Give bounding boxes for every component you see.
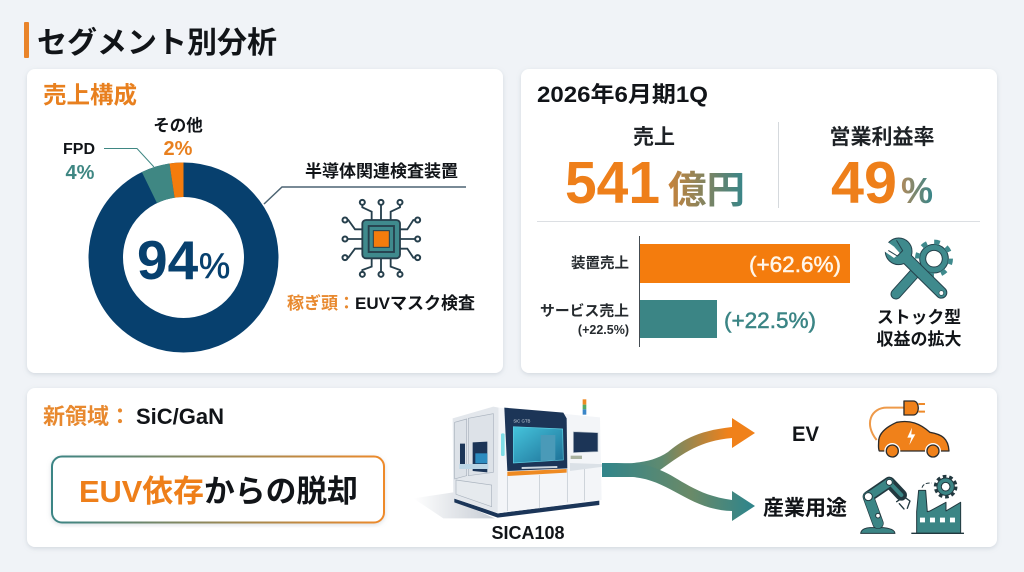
label: industrial use: 産業用途 bbox=[763, 497, 847, 520]
label: other 2%: 2% bbox=[164, 138, 193, 160]
metric: sales 541 oku yen: 541 bbox=[565, 150, 660, 216]
label: FPD 4% bbox=[63, 141, 154, 184]
label: FPD 4%: 4% bbox=[66, 162, 95, 184]
label: SICA108: SICA108 bbox=[492, 523, 564, 543]
icon: electric car bbox=[870, 401, 949, 459]
illustration: SICA108 machine: SiC GTB bbox=[513, 419, 531, 424]
panel: sales composition bbox=[27, 69, 503, 373]
donut chart: % bbox=[199, 247, 230, 286]
label: EV: EV bbox=[792, 423, 819, 446]
bar chart: sales growth: 装置売上 bbox=[571, 255, 629, 272]
caption: stock revenue expansion: ストック型 bbox=[877, 308, 961, 327]
icon: factory and gear bbox=[911, 476, 964, 533]
bar chart: sales growth bbox=[540, 236, 850, 347]
icon: chip bbox=[342, 200, 420, 277]
label: semiconductor inspection equipment: 半導体関連検査装置 bbox=[305, 162, 458, 181]
metric: sales 541 oku yen: 売上 bbox=[633, 126, 675, 149]
title: セグメント別分析 bbox=[37, 27, 277, 60]
metric: operating margin 49%: 営業利益率 bbox=[830, 126, 934, 149]
label: FPD 4%: FPD bbox=[63, 141, 95, 158]
label: other 2% bbox=[153, 116, 203, 160]
panel heading: period: 2026年6月期1Q bbox=[537, 82, 708, 107]
heading accent bar bbox=[24, 22, 29, 58]
caption: stock revenue expansion bbox=[876, 308, 962, 349]
label: semiconductor inspection equipment bbox=[264, 162, 466, 204]
icon: wrench and gear bbox=[883, 238, 951, 295]
donut chart: 94 bbox=[137, 229, 199, 291]
metric: sales 541 oku yen bbox=[565, 126, 745, 216]
illustration: SICA108 machine bbox=[413, 399, 608, 518]
donut chart bbox=[106, 162, 261, 335]
metric: operating margin 49% bbox=[830, 126, 934, 216]
bar chart: sales growth: (+22.5%) bbox=[578, 323, 629, 337]
caption: stock revenue expansion: 収益の拡大 bbox=[876, 330, 962, 349]
caption: top earner EUV mask inspection: 稼ぎ頭：EUVマスク検査 bbox=[287, 293, 475, 313]
callout: departure from EUV dependence bbox=[52, 456, 384, 522]
bar chart: sales growth: (+62.6%) bbox=[749, 252, 841, 277]
bar chart: sales growth: (+22.5%) bbox=[724, 308, 816, 333]
callout: departure from EUV dependence: EUV依存からの脱却 bbox=[79, 474, 358, 509]
metric: sales 541 oku yen: 億円 bbox=[668, 170, 745, 212]
panel heading: sales composition: 売上構成 bbox=[43, 82, 137, 108]
panel heading: new domain SiC/GaN: 新領域： bbox=[43, 404, 131, 429]
panel heading: new domain SiC/GaN: SiC/GaN bbox=[136, 404, 224, 429]
bar chart: sales growth: サービス売上 bbox=[540, 302, 629, 320]
metric: operating margin 49%: 49 bbox=[831, 150, 897, 216]
arrow: to EV bbox=[602, 418, 755, 477]
panel: new domains bbox=[27, 388, 997, 547]
arrow: to industrial use bbox=[602, 463, 755, 521]
label: other 2%: その他 bbox=[153, 116, 203, 135]
panel: 2026 fiscal Q1 results bbox=[521, 69, 997, 373]
icon: robot arm bbox=[861, 479, 910, 533]
metric: operating margin 49%: % bbox=[901, 170, 933, 211]
